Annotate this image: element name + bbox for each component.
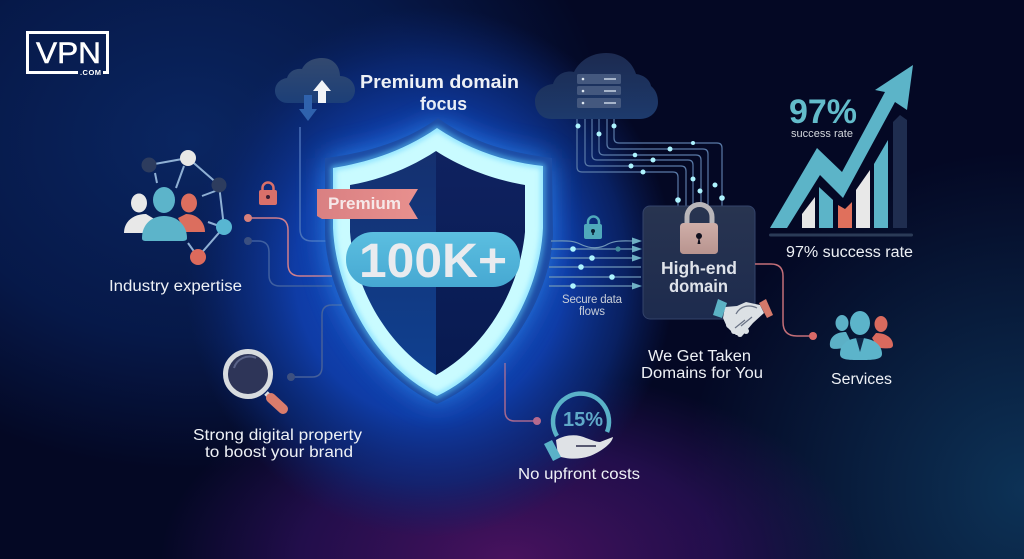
teal cuff (713, 299, 727, 318)
label: high-end domain (661, 258, 737, 296)
label: 97 percent success rate: 97% success rate (786, 244, 913, 261)
icon: people network (124, 150, 232, 265)
red cuff (759, 299, 773, 318)
connector line: lock box to services (755, 264, 817, 340)
label: strong digital property: Strong digital property (193, 427, 362, 444)
figure: 97 percent: 97% (789, 93, 857, 131)
icon: handshake (713, 299, 773, 337)
chart: 97 percent success rate: success rate (791, 128, 853, 140)
icon: magnifying glass (226, 352, 283, 409)
rising arrow (770, 65, 913, 228)
logo: VPN.com (28, 32, 108, 77)
label: no upfront costs: No upfront costs (518, 466, 640, 483)
label: we get taken domains for you (641, 348, 763, 382)
shield left half (350, 151, 436, 375)
label: industry expertise: Industry expertise (109, 278, 242, 295)
ribbon: premium (317, 189, 418, 219)
panel: high-end domain lock box (643, 204, 755, 319)
connector line: shield to no upfront costs (505, 363, 541, 425)
label: high-end domain: domain (669, 276, 728, 296)
label: strong digital property (193, 427, 362, 461)
label: we get taken domains for you: Domains for You (641, 365, 763, 382)
icon: 15 percent gauge and hand: 15% (563, 409, 603, 431)
heading: premium domain focus: focus (420, 94, 467, 114)
logo: VPN.com: .COM (80, 68, 101, 77)
label: secure data flows: Secure data (562, 294, 623, 306)
connector lines: left side of shield (244, 127, 342, 381)
label: we get taken domains for you: We Get Taken (648, 348, 751, 365)
logo: VPN.com: VPN (36, 37, 101, 70)
icon: server cloud (535, 53, 658, 119)
icon: services people (830, 311, 893, 360)
label: secure data flows (562, 294, 623, 318)
central shield (325, 118, 553, 404)
label: services: Services (831, 371, 892, 388)
ribbon: premium: Premium (328, 195, 401, 213)
icon: upload cloud (275, 58, 355, 121)
heading: premium domain focus (360, 72, 519, 114)
label: high-end domain: High-end (661, 258, 737, 278)
server rack (577, 74, 621, 108)
icon: 15 percent gauge and hand (544, 394, 613, 461)
icon: red padlock (259, 183, 277, 205)
label: secure data flows: flows (579, 306, 605, 318)
chart: 97 percent success rate (769, 65, 913, 236)
icon: large padlock (680, 204, 718, 254)
shield right half (436, 151, 525, 375)
circuit lines: cloud to lock box (576, 119, 725, 206)
secure data flow arrows (549, 238, 642, 290)
icon: teal padlock (584, 216, 602, 239)
label: strong digital property: to boost your brand (205, 444, 353, 461)
pill: 100K+: 100K+ (359, 235, 507, 288)
heading: premium domain focus: Premium domain (360, 72, 519, 92)
chart bars (802, 115, 907, 228)
